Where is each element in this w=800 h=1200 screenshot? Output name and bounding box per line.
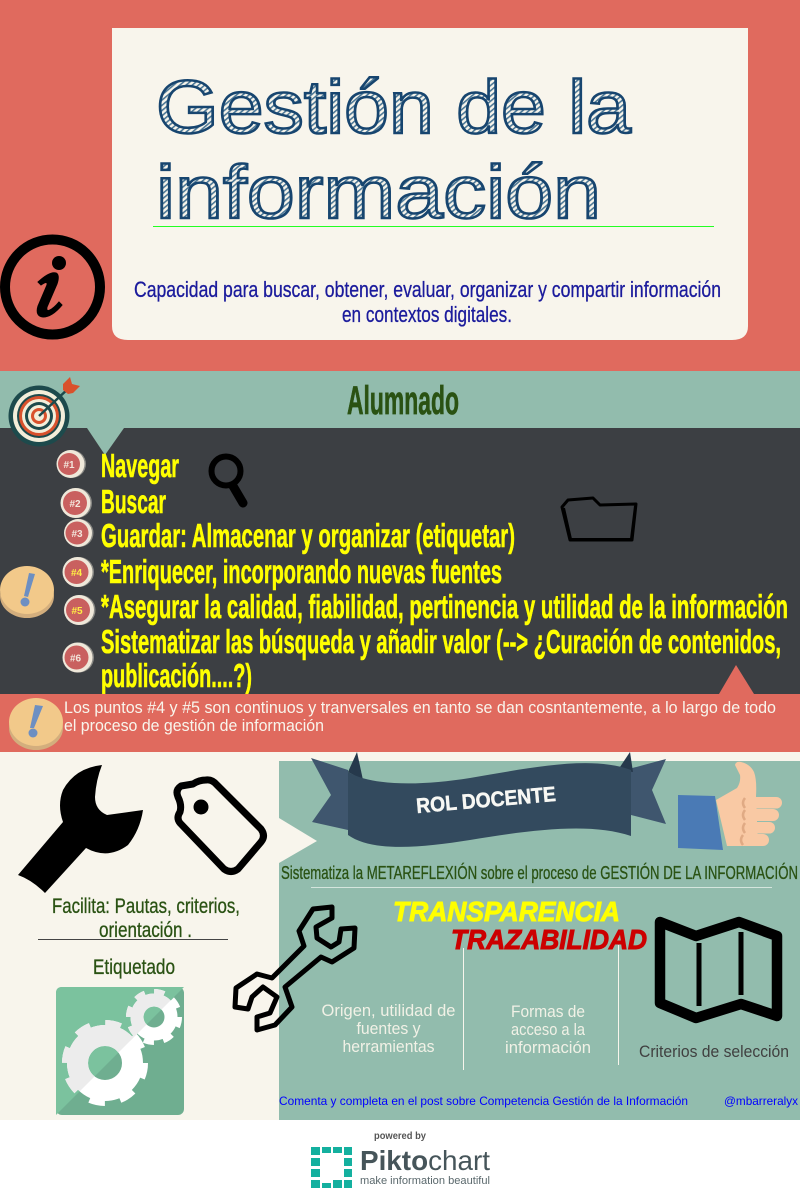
subtitle: en contextos digitales. — [342, 302, 512, 327]
subtitle — [134, 277, 721, 327]
pointer — [279, 818, 317, 863]
facilita text: Facilita: Pautas, criterios, — [52, 895, 240, 918]
pointer — [87, 428, 124, 455]
number badges: #3 — [71, 529, 83, 540]
column dividers — [463, 948, 464, 1070]
icon: piktochart logo — [311, 1147, 352, 1188]
icon: folder — [562, 498, 636, 540]
icon: magnifier — [212, 456, 243, 503]
list of steps: Buscar — [101, 483, 166, 520]
icon: gears — [56, 987, 184, 1115]
number badges: #4 — [71, 568, 82, 579]
icon: solid wrench — [18, 765, 143, 893]
icon: exclamation coin — [0, 566, 54, 618]
number badges: #2 — [69, 499, 81, 510]
panel: rol docente — [235, 752, 800, 1120]
column: criterios: Criterios de selección — [639, 1042, 789, 1061]
title: Gestión de la — [156, 65, 631, 149]
tagline: make information beautiful — [360, 1175, 490, 1187]
note text — [64, 699, 776, 735]
list of steps: Navegar — [101, 447, 179, 484]
number badges: #5 — [71, 606, 83, 617]
icon: target — [8, 377, 80, 446]
title card — [112, 28, 748, 340]
note text: Los puntos #4 y #5 son continuos y tranversales en tanto se dan cosntantemente, a lo largo de todo — [64, 699, 776, 717]
etiquetado label: Etiquetado — [93, 956, 175, 979]
column: origen: herramientas — [342, 1037, 434, 1056]
wordmark: Piktochart — [360, 1145, 490, 1176]
comment link: Comenta y completa en el post sobre Competencia Gestión de la Información — [279, 1094, 688, 1108]
trazabilidad: TRAZABILIDAD — [451, 924, 647, 955]
list of steps: *Enriquecer, incorporando nuevas fuentes — [101, 553, 502, 590]
panel: facilita — [0, 752, 800, 1120]
panel: footer — [0, 1120, 800, 1200]
list of steps: publicación....?) — [101, 657, 252, 694]
ribbon banner — [311, 752, 666, 847]
icon: outline wrench — [235, 907, 355, 1030]
panel: header — [0, 0, 800, 371]
title — [156, 65, 631, 234]
panel: alumnado — [0, 371, 800, 694]
column: origen — [322, 1001, 456, 1056]
author handle: @mbarreralyx — [724, 1094, 798, 1108]
number badges: #1 — [63, 460, 75, 471]
number badges: #6 — [70, 654, 81, 664]
title: información — [156, 150, 601, 234]
ribbon banner: ROL DOCENTE — [415, 783, 557, 818]
icon: information — [5, 240, 100, 334]
icon: exclamation coin — [9, 698, 63, 750]
column: formas — [505, 1002, 591, 1057]
number badges — [56, 450, 96, 672]
column: formas: información — [505, 1038, 591, 1057]
column: origen: Origen, utilidad de — [322, 1001, 456, 1020]
facilita text: orientación . — [99, 919, 192, 942]
title underline — [153, 226, 714, 227]
note text: el proceso de gestión de información — [64, 717, 324, 735]
icon: tag — [177, 780, 264, 872]
column: formas: Formas de — [511, 1002, 585, 1021]
list of steps — [101, 447, 788, 694]
pointer — [719, 665, 754, 694]
column: origen: fuentes y — [356, 1019, 421, 1038]
panel: note — [0, 665, 800, 752]
icon: thumbs up — [678, 762, 782, 850]
heading: Alumnado — [347, 379, 459, 423]
column: formas: acceso a la — [511, 1020, 585, 1039]
facilita text — [52, 895, 240, 942]
icon: map — [660, 922, 777, 1018]
transparencia: TRANSPARENCIA — [393, 896, 620, 927]
powered by: powered by — [374, 1131, 426, 1142]
list of steps: Guardar: Almacenar y organizar (etiquetar) — [101, 517, 515, 554]
